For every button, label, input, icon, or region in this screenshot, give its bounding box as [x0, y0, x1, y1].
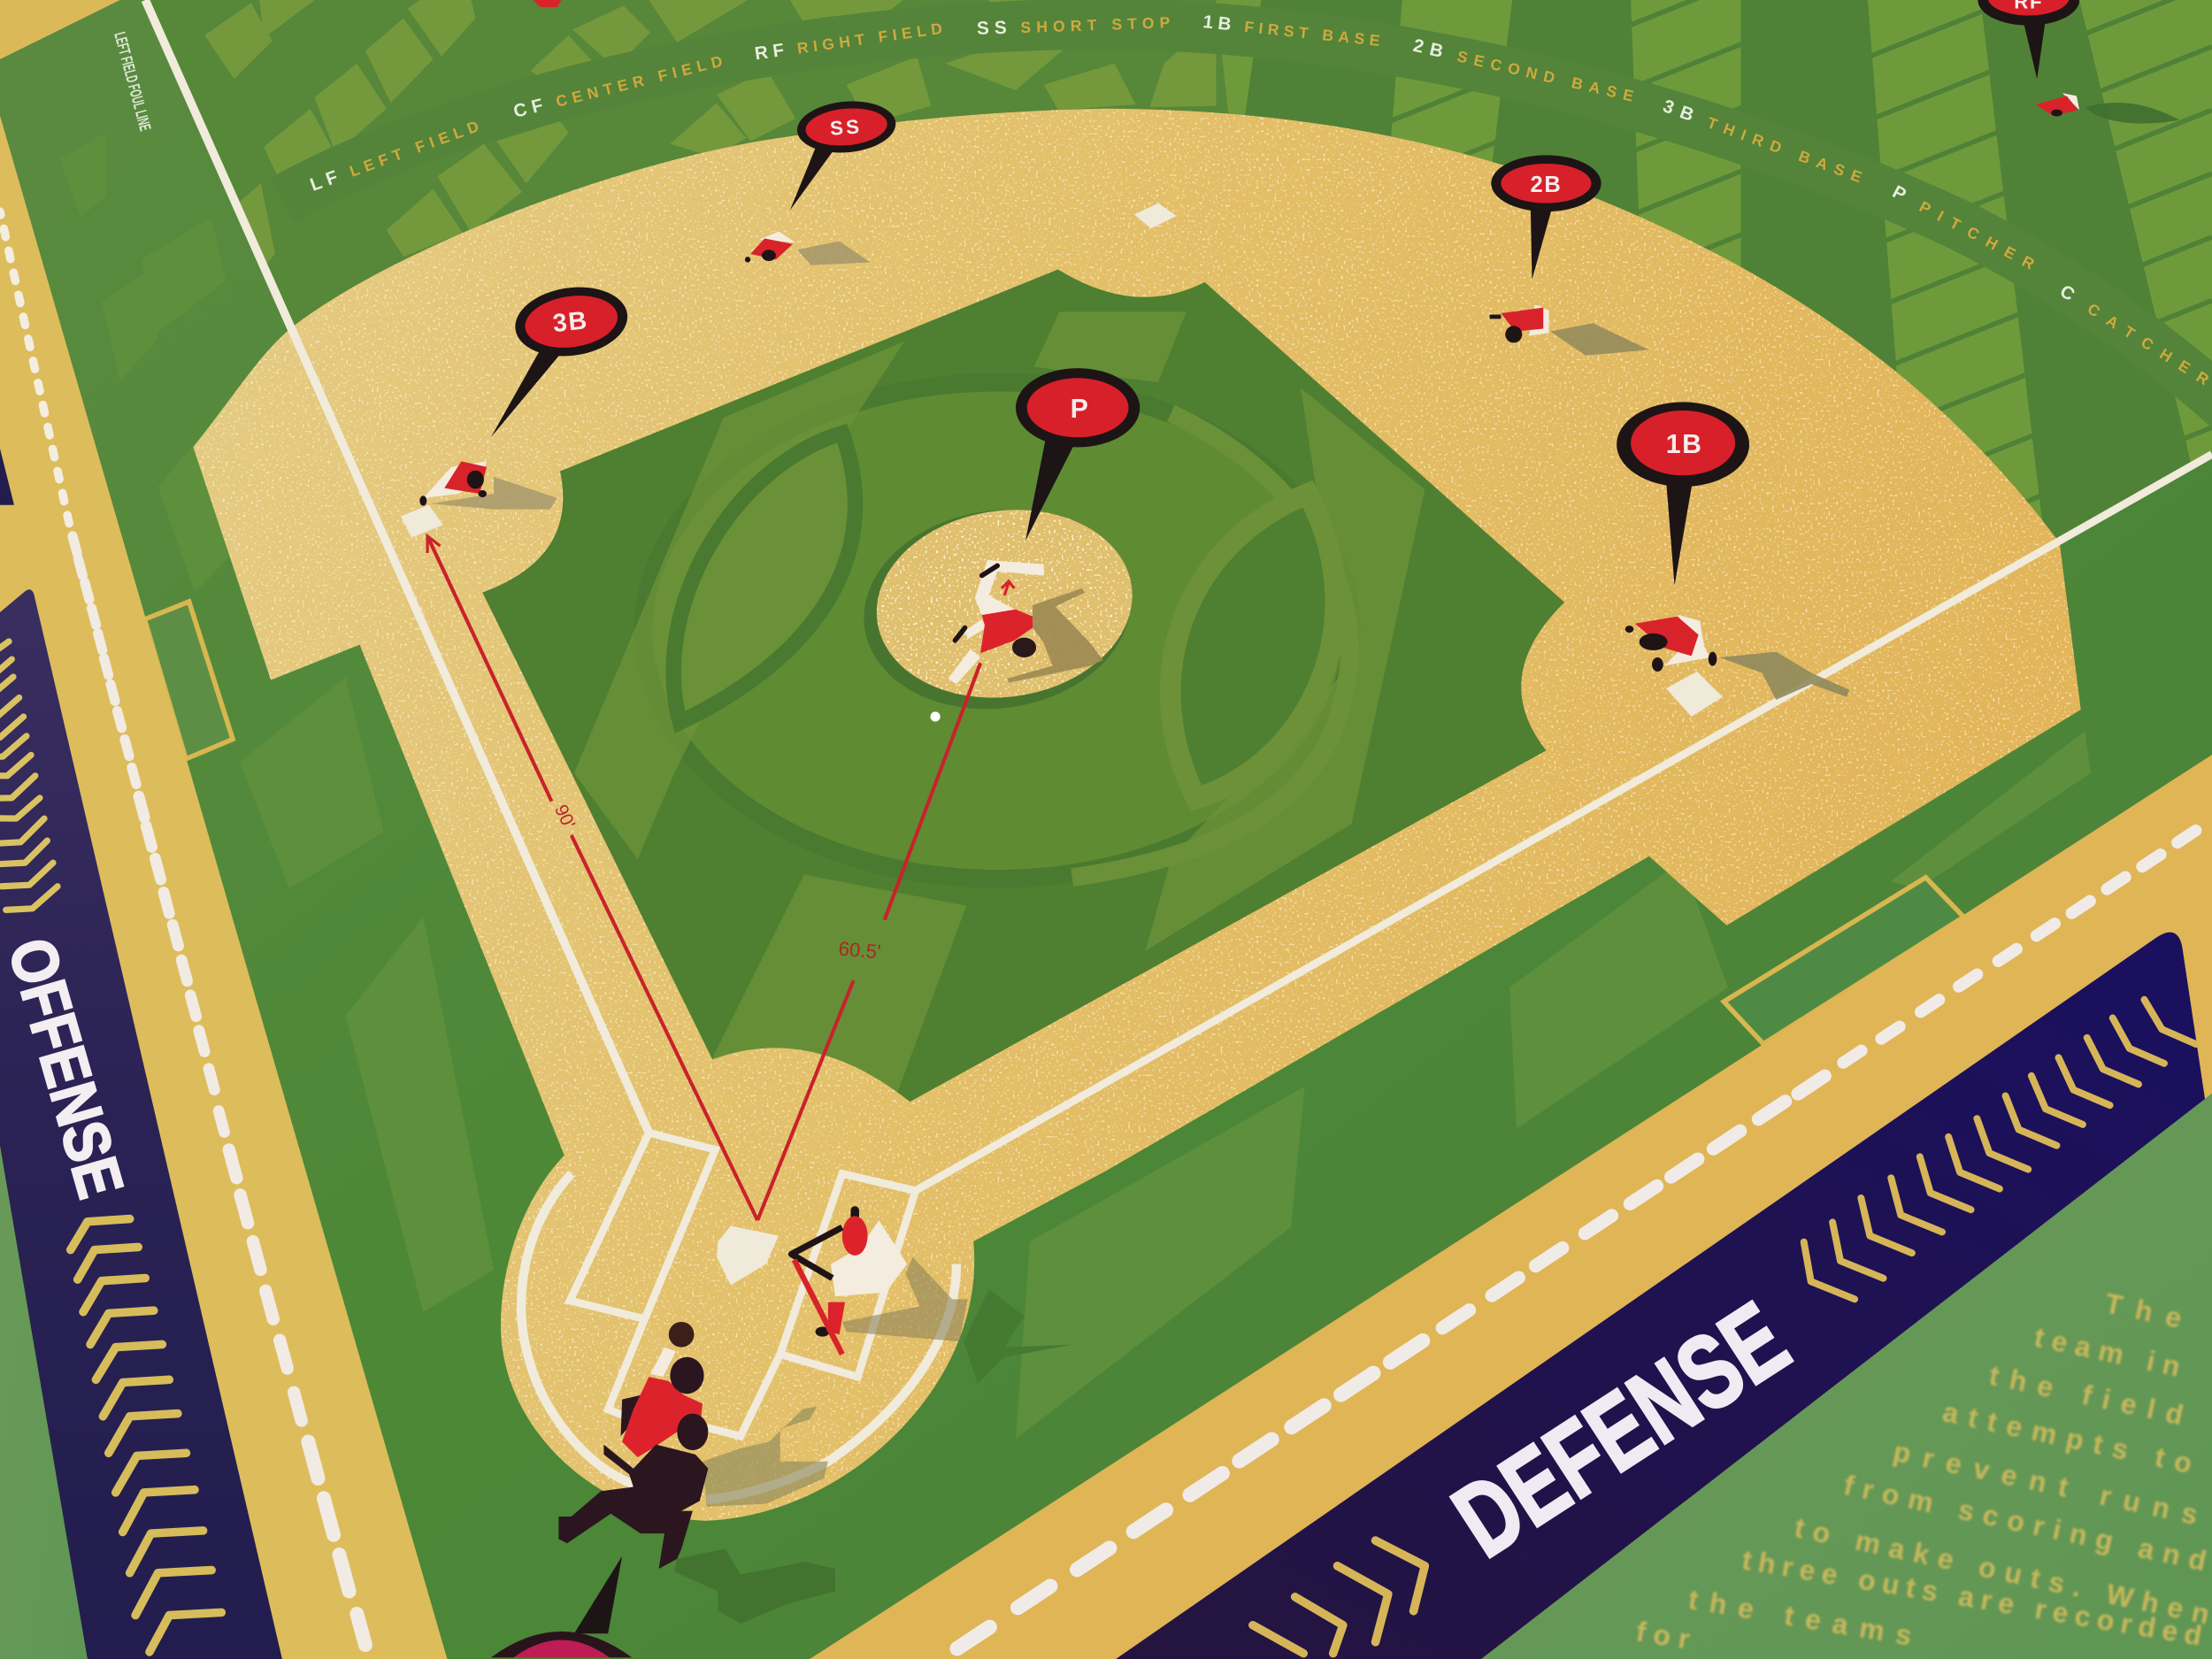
measurement: 90 feet: 90': [550, 802, 579, 832]
defense description text: to make outs. When: [1792, 1511, 2212, 1631]
pin: 2B: [1491, 155, 1601, 280]
position legend: 1B FIRST BASE: [1202, 12, 1381, 50]
position legend: 2B SECOND BASE: [1411, 35, 1636, 106]
position legend: RF RIGHT FIELD: [754, 18, 943, 64]
foul area boxes: [144, 602, 1963, 1044]
defense description text: from scoring and: [1841, 1469, 2209, 1577]
pitched ball: [930, 711, 941, 722]
pin: P: [1016, 368, 1140, 541]
pin: SS: SS: [829, 115, 863, 140]
bottom right panel: [1481, 1094, 2212, 1659]
pin: RF: [1978, 0, 2079, 79]
defense description text: team in: [2032, 1321, 2183, 1383]
defense description text: for: [1634, 1616, 1692, 1655]
player: short stop: [745, 231, 871, 265]
player: third baseman: [419, 461, 557, 510]
pin: partially visible catcher marker: [491, 1556, 632, 1657]
left foul line label: LEFT FIELD FOUL LINE: [111, 30, 155, 133]
player: left fielder top edge: [534, 0, 562, 7]
defense band: [1116, 933, 2205, 1659]
foul territory patches: [59, 133, 2091, 1439]
measurement: 60.5 feet: 60.5': [838, 937, 881, 964]
pin: 3B: [491, 280, 632, 437]
second base bag: [1134, 204, 1177, 228]
pitcher's mound: [864, 510, 1133, 710]
defense description text: attempts to: [1939, 1395, 2195, 1479]
defense description text: three outs are recorded: [1740, 1543, 2204, 1652]
offense band: [0, 589, 282, 1659]
bottom right track: [810, 755, 2212, 1659]
player: second baseman: [1490, 304, 1649, 356]
position legend: 3B THIRD BASE: [1660, 96, 1865, 187]
pin: SS: [790, 97, 898, 211]
measurement: 60.5 feet: [757, 663, 980, 1220]
offense chevrons: [71, 1219, 221, 1652]
position legend: C CATCHER: [2056, 280, 2212, 389]
pin: 3B: 3B: [551, 306, 589, 338]
defense description text: prevent runs: [1891, 1435, 2200, 1531]
top left yellow corner: [0, 0, 120, 59]
defense chevrons right: [1804, 1000, 2196, 1299]
position legend: P PITCHER: [1889, 181, 2039, 274]
player: pitcher: [948, 560, 1103, 684]
pin: P: P: [1071, 395, 1088, 424]
pin: 1B: [1617, 402, 1749, 586]
position legend: CF CENTER FIELD: [511, 50, 725, 122]
measurement: 90 feet: [427, 536, 757, 1220]
defense description text: [1634, 1286, 2212, 1655]
position legend: [307, 12, 2212, 389]
player: catcher and umpire: [558, 1322, 835, 1624]
player: right fielder: [2036, 93, 2179, 124]
defense description text: The: [2102, 1286, 2185, 1334]
outfield grass with mowing pattern: [205, 0, 2212, 520]
player: first baseman: [1625, 615, 1849, 700]
defense description text: the teams: [1686, 1583, 1914, 1652]
position legend band: [282, 24, 2212, 409]
defense chevrons left: [1253, 1540, 1425, 1654]
infield dirt: [193, 108, 2081, 1521]
defense description text: the field: [1986, 1359, 2186, 1431]
bottom left panel: [0, 987, 99, 1659]
position legend: SS SHORT STOP: [977, 12, 1171, 39]
third base bag: [401, 505, 443, 537]
first base bag: [1666, 672, 1723, 717]
defense label: DEFENSE: [1434, 1280, 1808, 1579]
small navy fragment: [0, 449, 14, 505]
infield grass: [482, 270, 1564, 1102]
left track: [0, 116, 447, 1659]
player: batter: [791, 1210, 1073, 1384]
pin: 1B: 1B: [1666, 430, 1703, 459]
pin: 2B: 2B: [1531, 173, 1562, 197]
position legend: LF LEFT FIELD: [307, 115, 481, 196]
home plate: [717, 1226, 779, 1285]
